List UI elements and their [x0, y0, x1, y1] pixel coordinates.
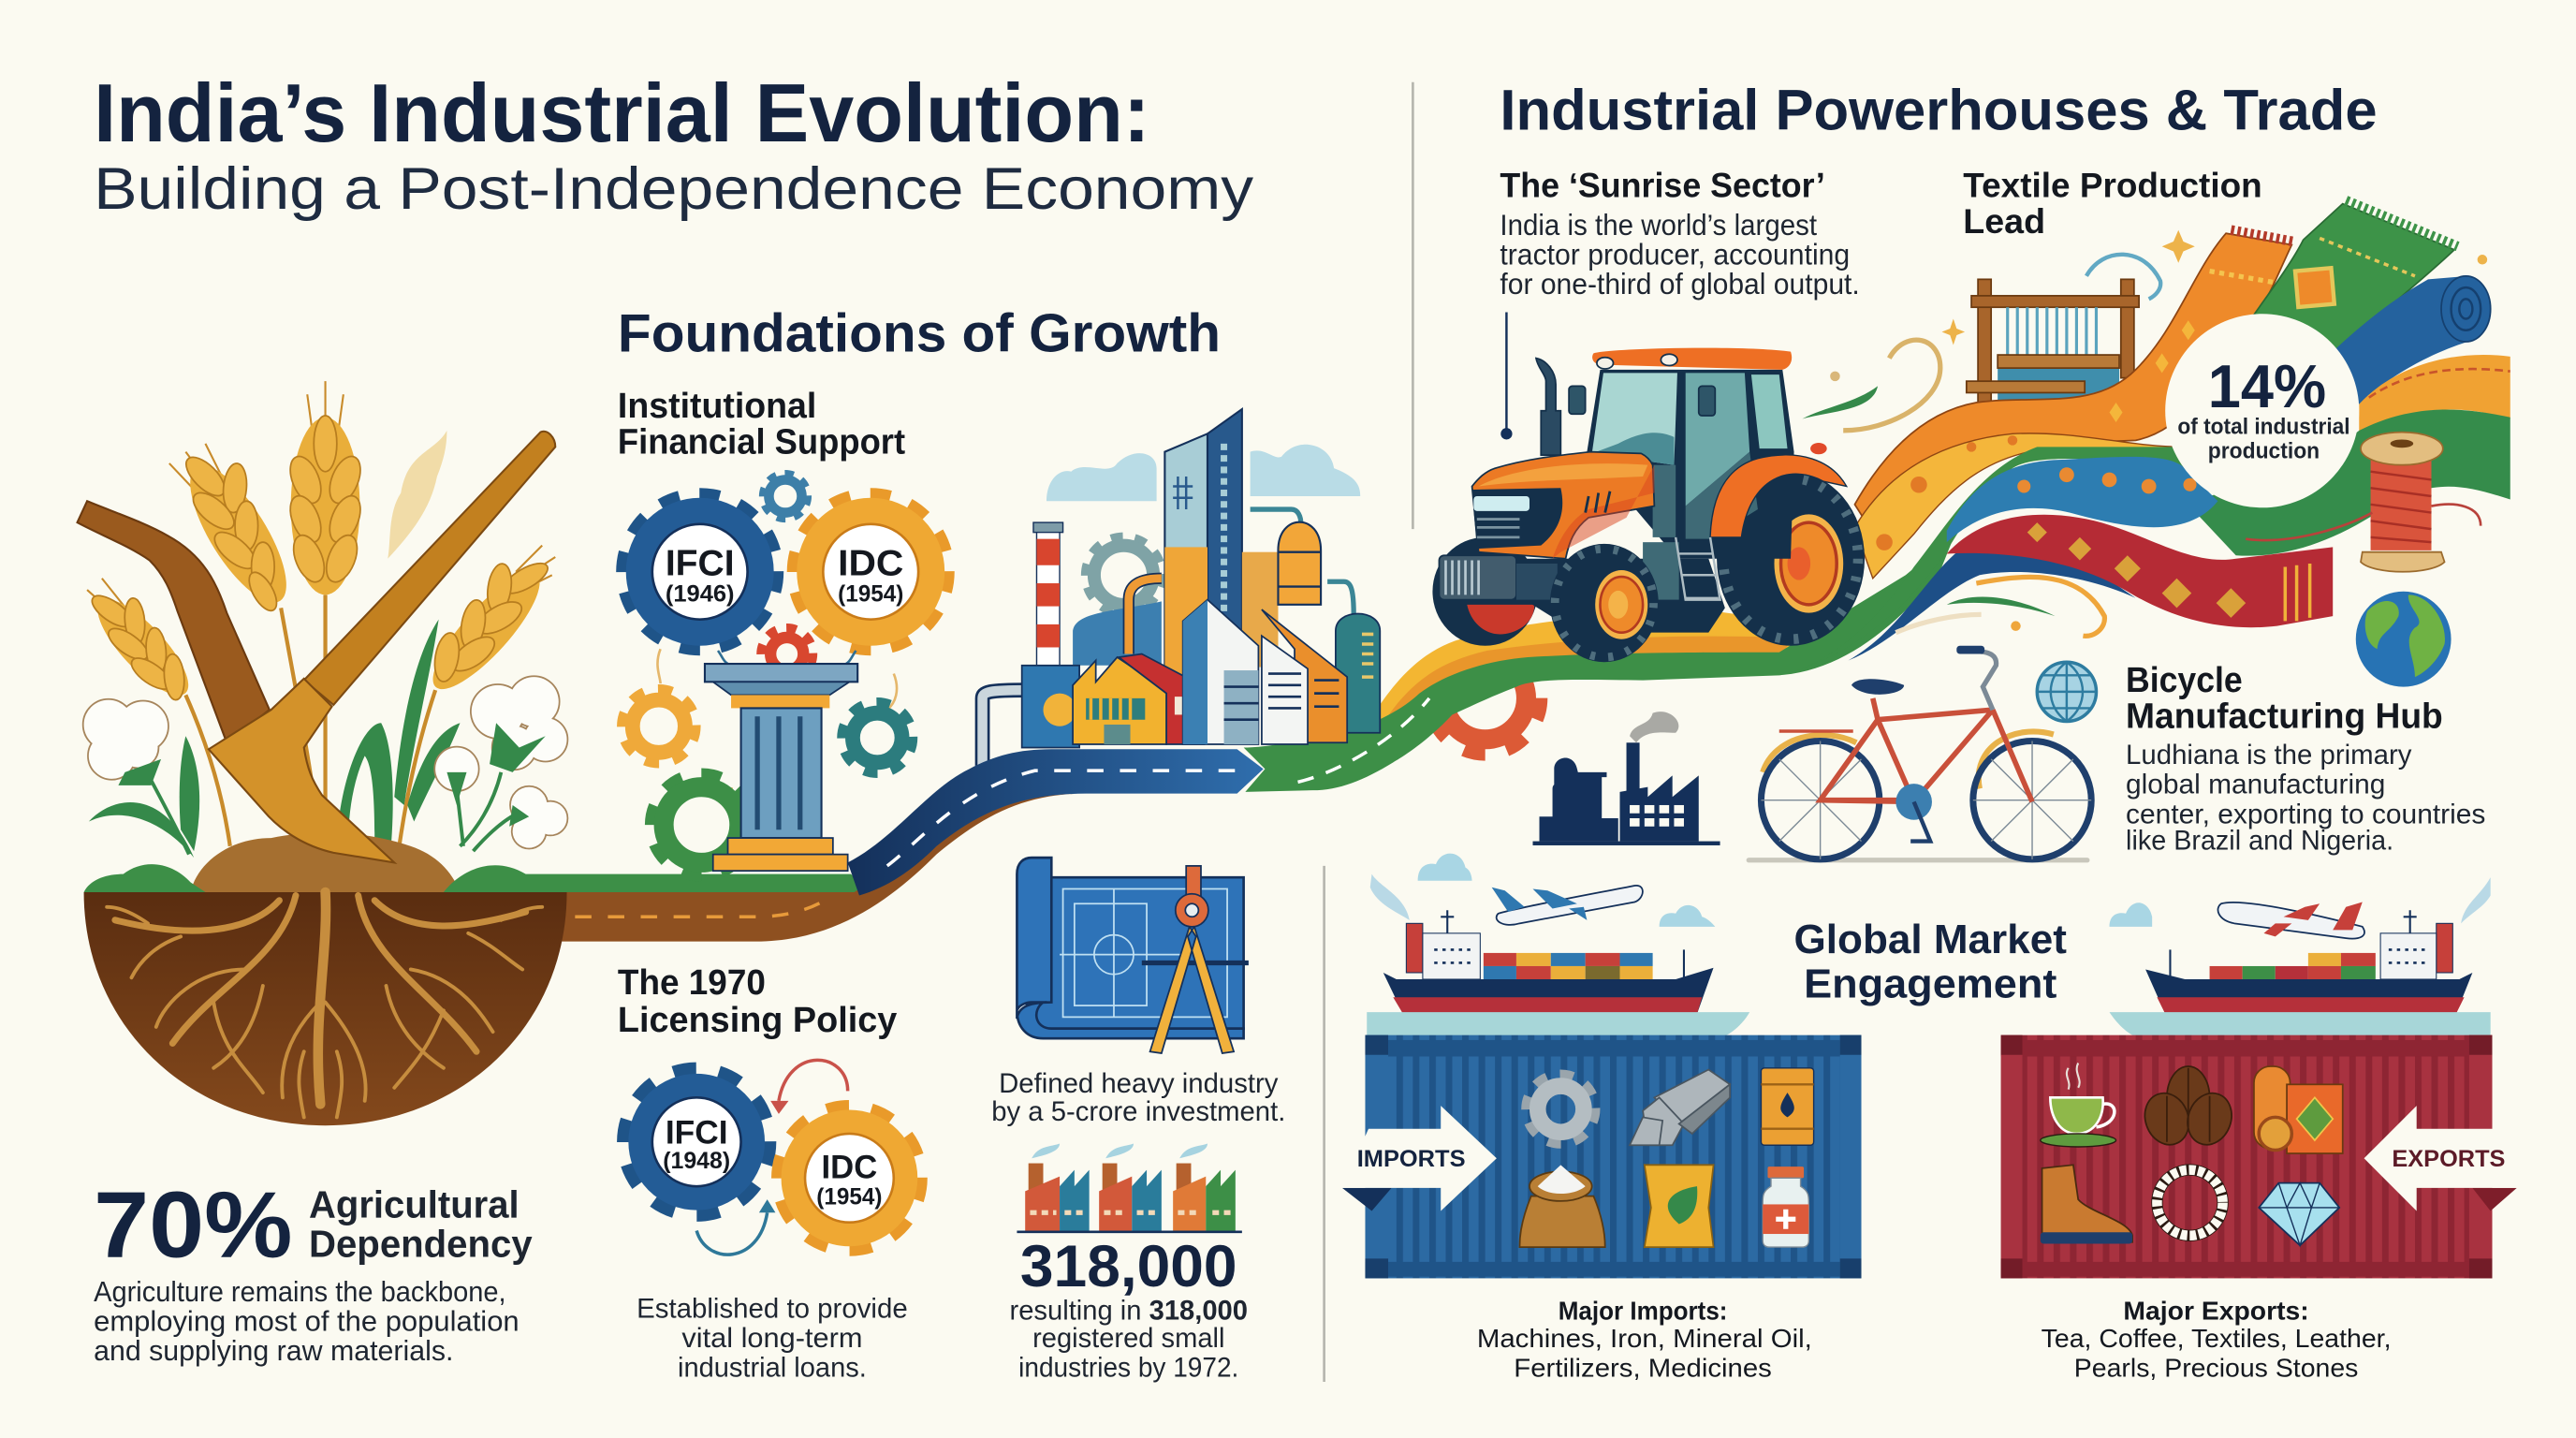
container [2001, 1035, 2492, 1278]
text: tractor producer: tractor producer, accounting [1500, 238, 1850, 271]
text: tractor producer: India is the world’s largest [1500, 208, 1817, 242]
teal gear [842, 703, 912, 772]
text: defined heavy industry: Defined heavy industry [999, 1068, 1279, 1099]
green ground strip [84, 864, 868, 892]
arrow: blue cycle [696, 1199, 775, 1255]
text: major imports [1477, 1296, 1812, 1383]
icon: gear [1528, 1077, 1593, 1142]
circle: 14 percent: 14% [2208, 352, 2326, 420]
front far wheel [1432, 537, 1538, 646]
roots [107, 892, 542, 1117]
deep blue ribbon [1848, 542, 2136, 661]
stat label: agricultural dependency: Agricultural [309, 1182, 520, 1225]
heading: bicycle manufacturing hub: Manufacturing Hub [2126, 696, 2443, 735]
chimney [1033, 522, 1063, 668]
gear: IDC 1954: IDC [838, 543, 903, 583]
circle: 14 percent: of total industrial [2177, 415, 2350, 439]
wheat stalks [85, 381, 555, 846]
title [94, 67, 1254, 222]
orange gear [622, 690, 695, 762]
gear: IFCI 1948: IFCI [666, 1114, 728, 1151]
water [2110, 1012, 2491, 1038]
hood [1472, 452, 1654, 559]
text: IFCI established: Established to provide [637, 1294, 908, 1325]
text: registered small industries: resulting in 318,000 [1010, 1295, 1248, 1326]
gear: IFCI 1946 [626, 498, 774, 646]
orange scarf [1854, 230, 2293, 559]
text: ludhiana: Ludhiana is the primary [2126, 740, 2412, 770]
text: tractor producer: for one-third of global output. [1500, 267, 1860, 301]
water [1367, 1012, 1749, 1038]
icon: coffee beans [2138, 1066, 2239, 1151]
panel: blueprint and compass [1017, 858, 1249, 1053]
text: major exports: Major Exports: [2123, 1296, 2309, 1325]
ship [1383, 910, 1714, 1014]
gear under the road [1431, 644, 1540, 753]
white building 2 [1262, 636, 1308, 744]
panel: licensing gears [626, 1060, 918, 1255]
blue patterned band [1947, 457, 2217, 542]
front bumper [1439, 555, 1558, 600]
front near wheel [1550, 544, 1659, 662]
gear: IFCI 1948: (1948) [663, 1149, 730, 1174]
heading: 1970 licensing policy: Licensing Policy [618, 1000, 897, 1039]
icon: small globe grid [2037, 662, 2096, 721]
circle: 14 percent: production [2208, 440, 2320, 464]
text: registered small industries: industries by 1972. [1018, 1353, 1238, 1384]
road dashes [575, 901, 825, 917]
text: ludhiana: center, exporting to countries [2126, 799, 2485, 829]
container [1365, 1035, 1862, 1278]
heading: textile production lead: Lead [1963, 202, 2045, 241]
heading: bicycle manufacturing hub: Bicycle [2126, 660, 2243, 699]
gear: IFCI 1946: (1946) [666, 581, 735, 607]
icon: earth globe [2356, 592, 2452, 687]
exhaust [1536, 359, 1560, 455]
red block [1119, 654, 1204, 744]
heading: institutional financial support: Institutional [618, 386, 816, 425]
heading: global market engagement: Engagement [1804, 961, 2057, 1006]
heading: industrial powerhouses and trade: Industrial Powerhouses & Trade [1500, 79, 2378, 143]
stat label: agricultural dependency: Dependency [309, 1223, 533, 1266]
yellow orange band [2359, 355, 2510, 433]
arrow: exports: EXPORTS [2392, 1147, 2505, 1172]
circle: 14 percent [2165, 314, 2359, 507]
icon: factory silhouette [1532, 712, 1720, 845]
text: ludhiana: global manufacturing [2126, 770, 2385, 800]
icon: iron ingots [1630, 1070, 1730, 1145]
clouds [1046, 445, 1360, 501]
leader line [1500, 312, 1513, 439]
text: agriculture backbone [94, 1275, 520, 1367]
green scarf [2252, 200, 2458, 370]
text: major imports: Machines, Iron, Mineral Oil, [1477, 1324, 1812, 1353]
text: agriculture backbone: and supplying raw materials. [94, 1334, 453, 1367]
teal tank [1336, 614, 1380, 733]
decorative swirls [1843, 340, 1940, 431]
title: India’s Industrial Evolution: [94, 67, 1150, 159]
cab roof [1592, 348, 1792, 370]
blue roll [2333, 276, 2491, 404]
cab [1569, 348, 1794, 559]
panel: imports [1342, 854, 1862, 1278]
text: IFCI established: industrial loans. [678, 1353, 867, 1384]
blue block [1022, 666, 1079, 748]
arrow: exports [2364, 1106, 2520, 1211]
green band [2185, 409, 2510, 556]
gear: IDC 1954: (1954) [816, 1184, 883, 1210]
text: IFCI established [637, 1294, 908, 1384]
text: defined heavy industry: by a 5-crore investment. [991, 1096, 1285, 1127]
icon: medicine bottle [1763, 1167, 1808, 1247]
text: registered small industries: registered small [1032, 1323, 1224, 1354]
heading: textile production lead [1963, 167, 2262, 241]
heading: foundations of growth: Foundations of Growth [618, 304, 1221, 364]
tan block and pipes [1242, 552, 1278, 668]
text: ludhiana [2126, 740, 2485, 856]
red band [1947, 515, 2333, 627]
icon: oil barrel [1761, 1068, 1814, 1145]
airplane [1492, 886, 1643, 925]
skyscraper [1164, 433, 1208, 723]
yellow factory [1073, 657, 1166, 744]
icon: diamond [2259, 1183, 2339, 1245]
gear: IFCI 1948 [626, 1071, 768, 1212]
ladder [1676, 537, 1720, 600]
title: Building a Post-Independence Economy [94, 156, 1254, 222]
motifs on yellow band [1876, 435, 2017, 550]
panel: exports [2001, 877, 2520, 1278]
compass [1150, 866, 1234, 1053]
under body [1503, 559, 1725, 633]
rear fender [1710, 455, 1847, 537]
ship [2145, 910, 2472, 1014]
green ribbon [1779, 447, 2185, 675]
arrow: red cycle [770, 1060, 848, 1114]
heading: global market engagement [1794, 917, 2067, 1006]
heading: institutional financial support: Financial Support [618, 421, 905, 461]
small blue gear [764, 475, 807, 518]
text: major exports: Pearls, Precious Stones [2074, 1354, 2358, 1383]
soil bowl [84, 892, 567, 1125]
text: major imports: Major Imports: [1559, 1296, 1727, 1325]
gear: IDC 1954: IDC [822, 1149, 877, 1185]
text: major exports [2042, 1296, 2392, 1383]
pillar [705, 651, 857, 871]
red gear [762, 629, 812, 679]
icon: grain sack [1519, 1165, 1605, 1247]
icon: tea cup [2041, 1064, 2116, 1147]
green gear [652, 775, 751, 874]
icon: fertilizer bag [1645, 1165, 1714, 1247]
arrow: imports [1342, 1106, 1497, 1211]
pick head [209, 679, 394, 862]
cotton bolls [84, 677, 567, 848]
illustration: tractor [1432, 348, 1865, 662]
pick handle [304, 432, 555, 705]
panel: blue road [848, 749, 1264, 895]
heading: institutional financial support [618, 386, 905, 461]
panel: textile ribbons [1779, 200, 2510, 675]
thread spool [2246, 433, 2481, 572]
panel: green yellow road behind tractor [1244, 534, 1955, 792]
clouds and smoke [2110, 902, 2152, 927]
stat: 318,000: 318,000 [1020, 1234, 1237, 1299]
text: tractor producer [1500, 208, 1860, 301]
soil mound [191, 832, 460, 892]
grey pipe [983, 690, 1027, 766]
orange building [1262, 609, 1347, 742]
text: registered small industries [1010, 1295, 1248, 1384]
gear: IDC 1954: (1954) [838, 581, 903, 607]
heading: 1970 licensing policy [618, 962, 897, 1039]
text: IFCI established: vital long-term [681, 1323, 862, 1354]
text: major imports: Fertilizers, Medicines [1514, 1354, 1772, 1383]
white building [1183, 600, 1258, 744]
curved handle of tool [78, 501, 270, 742]
panel: agriculture roots illustration [78, 381, 1086, 1125]
gear: IDC 1954 [797, 498, 944, 646]
icon: textile roll [2254, 1066, 2343, 1153]
text: ludhiana: like Brazil and Nigeria. [2126, 825, 2393, 856]
text: agriculture backbone: Agriculture remains the backbone, [94, 1275, 506, 1308]
arrow: imports: IMPORTS [1357, 1147, 1466, 1172]
panel: factory cluster [983, 409, 1380, 766]
text: major exports: Tea, Coffee, Textiles, Leather, [2042, 1324, 2392, 1353]
heading: global market engagement: Global Market [1794, 917, 2067, 962]
stat: 70 percent: 70% [94, 1173, 292, 1278]
heading: 1970 licensing policy: The 1970 [618, 962, 766, 1002]
loom [1967, 279, 2139, 431]
text: defined heavy industry [991, 1068, 1285, 1127]
yellow band [1854, 433, 2185, 579]
blue tank [1073, 601, 1162, 666]
heading: bicycle manufacturing hub [2126, 660, 2443, 735]
rear wheel [1717, 472, 1865, 646]
icon: small factories [1017, 1143, 1242, 1233]
icon: pearl ring [2157, 1170, 2223, 1236]
heading: sunrise sector: The ‘Sunrise Sector’ [1500, 167, 1825, 205]
grille [1472, 488, 1562, 549]
grey gear [1086, 537, 1162, 613]
text: agriculture backbone: employing most of the population [94, 1305, 520, 1338]
brown road [559, 794, 1086, 942]
lower swooshes [1947, 597, 2056, 616]
airplane [2217, 902, 2364, 939]
connectors [657, 649, 897, 788]
icon: leather boot [2041, 1165, 2132, 1244]
green leaves [89, 620, 460, 858]
stat label: agricultural dependency [309, 1182, 533, 1266]
gear: IDC 1954 [781, 1109, 918, 1247]
clouds and smoke [1418, 854, 1715, 927]
icon: bicycle [1747, 646, 2091, 862]
panel: institutional gears and pillar [622, 475, 944, 874]
gear: IFCI 1946: IFCI [666, 543, 735, 583]
pale wheat [388, 431, 446, 559]
orange tank [1278, 522, 1321, 605]
heading: textile production lead: Textile Production [1963, 167, 2262, 205]
